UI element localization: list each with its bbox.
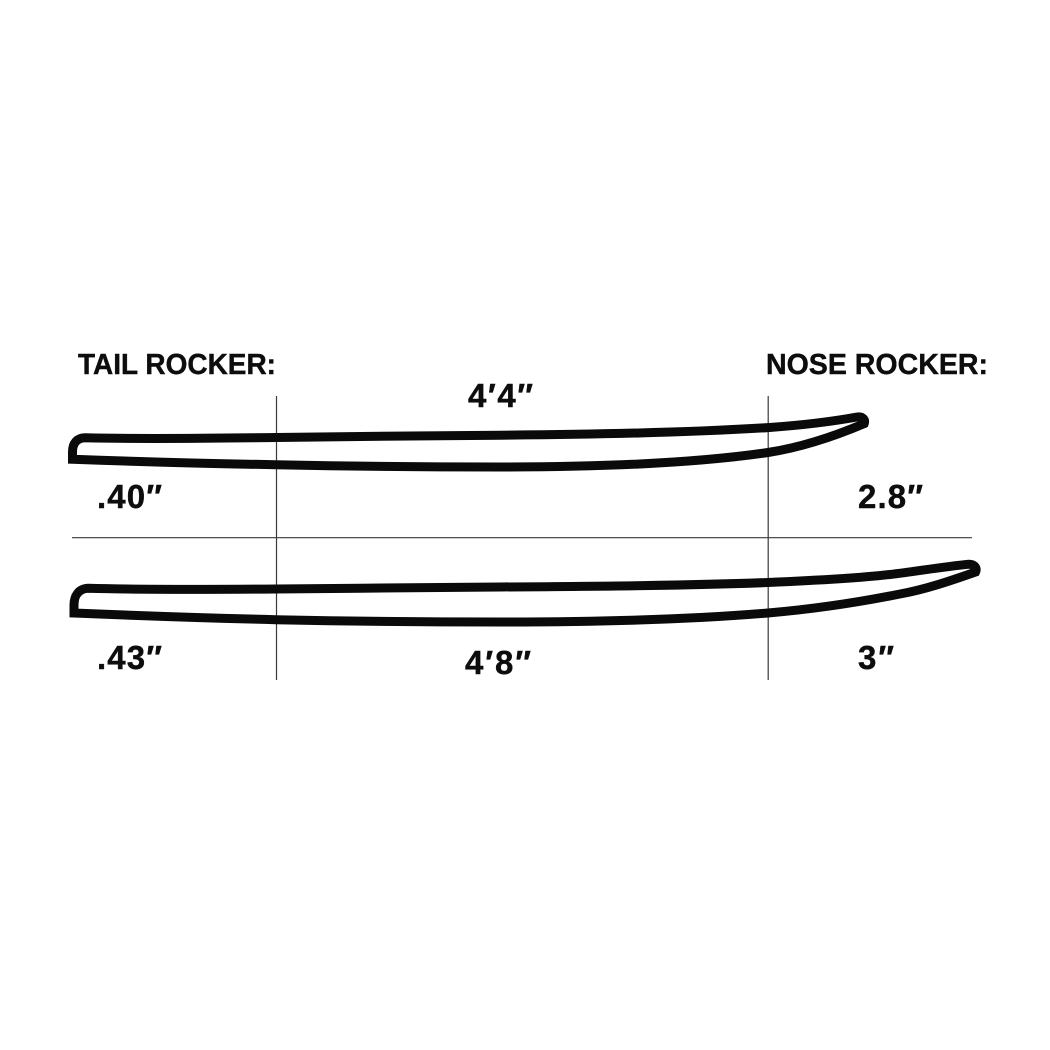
board outline: top board [72, 417, 865, 467]
label: bottom board nose value: 3″ [858, 639, 894, 676]
label: top board length: 4′4″ [468, 377, 533, 414]
heading: nose rocker: NOSE ROCKER: [766, 349, 988, 381]
heading: tail rocker: TAIL ROCKER: [78, 349, 276, 381]
label: top board tail value: .40″ [97, 478, 162, 515]
label: bottom board length: 4′8″ [465, 644, 531, 681]
label: top board nose value: 2.8″ [858, 478, 923, 515]
board outline: bottom board [74, 564, 976, 622]
label: bottom board tail value: .43″ [97, 639, 162, 676]
